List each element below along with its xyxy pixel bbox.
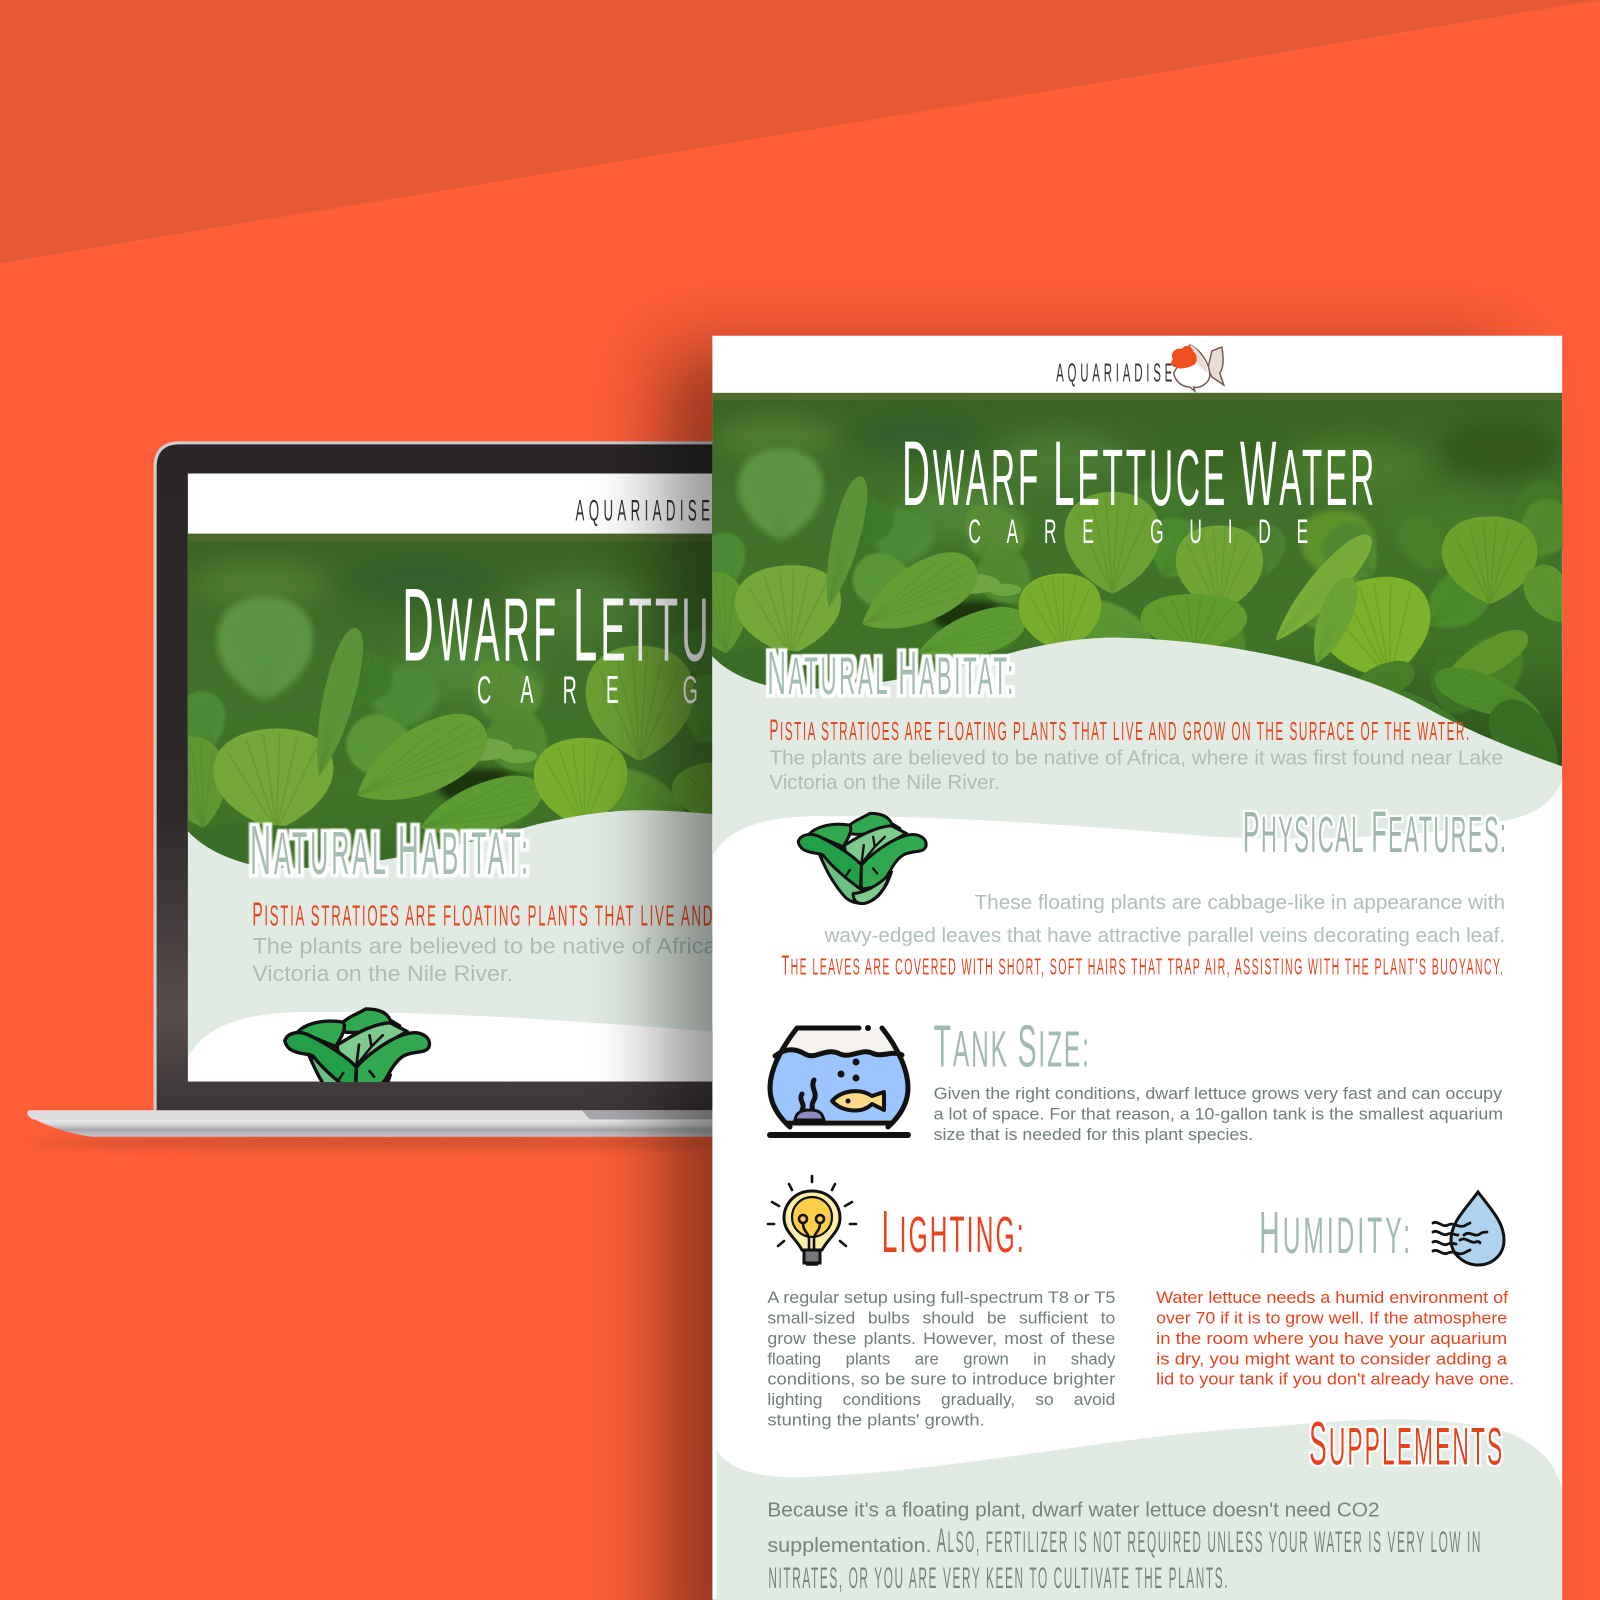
supplements body text: supplementation. xyxy=(767,1535,932,1557)
supplements body text: ALSO, FERTILIZER IS NOT REQUIRED UNLESS YOUR WATER IS VERY LOW IN xyxy=(937,1521,1480,1560)
tank size body text: size that is needed for this plant species. xyxy=(934,1125,1253,1144)
humidity body text xyxy=(1156,1289,1514,1389)
lighting body text: floating plants are grown in shady xyxy=(767,1350,1116,1368)
panel: infographic sheet xyxy=(681,336,1584,1600)
tank size body text xyxy=(934,1084,1503,1144)
diagonal dark band xyxy=(0,0,1600,263)
natural habitat red text: PISTIA STRATIOES ARE FLOATING PLANTS THAT LIVE AND GROW ON THE SURFACE OF THE WATER. xyxy=(769,713,1469,746)
laptop body text: Victoria on the Nile River. xyxy=(252,961,513,986)
laptop ground shadow xyxy=(31,1138,745,1148)
heading: humidity: HUMIDITY: xyxy=(1259,1200,1410,1266)
heading: physical features: PHYSICAL FEATURES: xyxy=(1243,800,1506,865)
laptop title: DWARF LETTUCE WATER xyxy=(402,567,936,683)
supplements body text: NITRATES, OR YOU ARE VERY KEEN TO CULTIVATE THE PLANTS. xyxy=(768,1561,1228,1594)
header photo xyxy=(681,393,1584,793)
icon: lettuce xyxy=(798,813,926,904)
laptop lettuce icon xyxy=(283,1007,432,1082)
logo xyxy=(1056,345,1224,391)
physical features red text: THE LEAVES ARE COVERED WITH SHORT, SOFT HAIRS THAT TRAP AIR, ASSISTING WITH THE PLANT'S BUOYANCY. xyxy=(782,950,1503,981)
title: DWARF LETTUCE WATER xyxy=(902,422,1374,525)
laptop screen xyxy=(188,474,712,1082)
icon: water drop xyxy=(1433,1192,1504,1265)
bottom green wave xyxy=(716,1419,1562,1600)
lighting body text: small-sized bulbs should be sufficient to xyxy=(767,1309,1115,1327)
sheet shadow xyxy=(663,352,1510,1600)
humidity body text: over 70 if it is to grow well. If the atmosphere xyxy=(1156,1309,1507,1327)
physical features body text: wavy-edged leaves that have attractive parallel veins decorating each leaf. xyxy=(823,925,1505,947)
laptop body text xyxy=(252,938,712,981)
laptop base xyxy=(27,1110,735,1137)
physical features body text: These floating plants are cabbage-like in appearance with xyxy=(974,892,1505,914)
laptop logo text: AQUARIADISE xyxy=(576,493,710,527)
tank size body text: Given the right conditions, dwarf lettuce grows very fast and can occupy xyxy=(934,1084,1503,1103)
heading: tank size: TANK SIZE: xyxy=(934,1013,1089,1079)
icon: light bulb xyxy=(768,1176,856,1264)
natural habitat body text xyxy=(770,750,1502,789)
subtitle: CARE GUIDE xyxy=(968,511,1308,550)
icon: goldfish xyxy=(1171,345,1224,391)
humidity body text: Water lettuce needs a humid environment of xyxy=(1156,1289,1509,1307)
lighting body text: grow these plants. However, most of these xyxy=(767,1330,1115,1348)
natural habitat body text: Victoria on the Nile River. xyxy=(769,772,1000,794)
supplements body text xyxy=(767,1499,1480,1594)
lighting body text: stunting the plants' growth. xyxy=(767,1412,985,1430)
supplements body text: Because it's a floating plant, dwarf water lettuce doesn't need CO2 xyxy=(767,1499,1380,1521)
natural habitat body text: The plants are believed to be native of Africa, where it was first found near Lake xyxy=(769,747,1503,769)
lighting body text: conditions, so be sure to introduce brighter xyxy=(767,1371,1116,1389)
laptop subtitle: CARE GUIDE xyxy=(477,668,861,712)
laptop heading: NATURAL HABITAT: xyxy=(250,813,528,889)
logo: AQUARIADISE xyxy=(1056,360,1172,388)
physical features body text xyxy=(823,892,1505,947)
icon: fish bowl xyxy=(770,1025,908,1135)
laptop body text: The plants are believed to be native of Africa, where it was first found near Lake xyxy=(252,933,1081,958)
laptop red intro: PISTIA STRATIOES ARE FLOATING PLANTS THAT LIVE AND GROW ON THE SURFACE OF THE WATER. xyxy=(252,895,1043,933)
lighting body text xyxy=(767,1289,1116,1430)
lighting body text: A regular setup using full-spectrum T8 or T5 xyxy=(767,1289,1115,1307)
humidity body text: lid to your tank if you don't already have one. xyxy=(1156,1371,1514,1389)
lighting body text: lighting conditions gradually, so avoid xyxy=(767,1391,1115,1409)
heading: natural habitat: NATURAL HABITAT: xyxy=(767,638,1013,707)
humidity body text: is dry, you might want to consider adding a xyxy=(1156,1350,1508,1368)
heading: lighting: LIGHTING: xyxy=(882,1198,1024,1265)
top green wave xyxy=(712,638,1562,857)
heading: supplements: SUPPLEMENTS xyxy=(1309,1408,1502,1477)
laptop lid xyxy=(155,443,735,1112)
tank size body text: a lot of space. For that reason, a 10-gallon tank is the smallest aquarium xyxy=(934,1104,1503,1123)
humidity body text: in the room where you have your aquarium xyxy=(1156,1330,1507,1348)
laptop xyxy=(27,441,712,1153)
